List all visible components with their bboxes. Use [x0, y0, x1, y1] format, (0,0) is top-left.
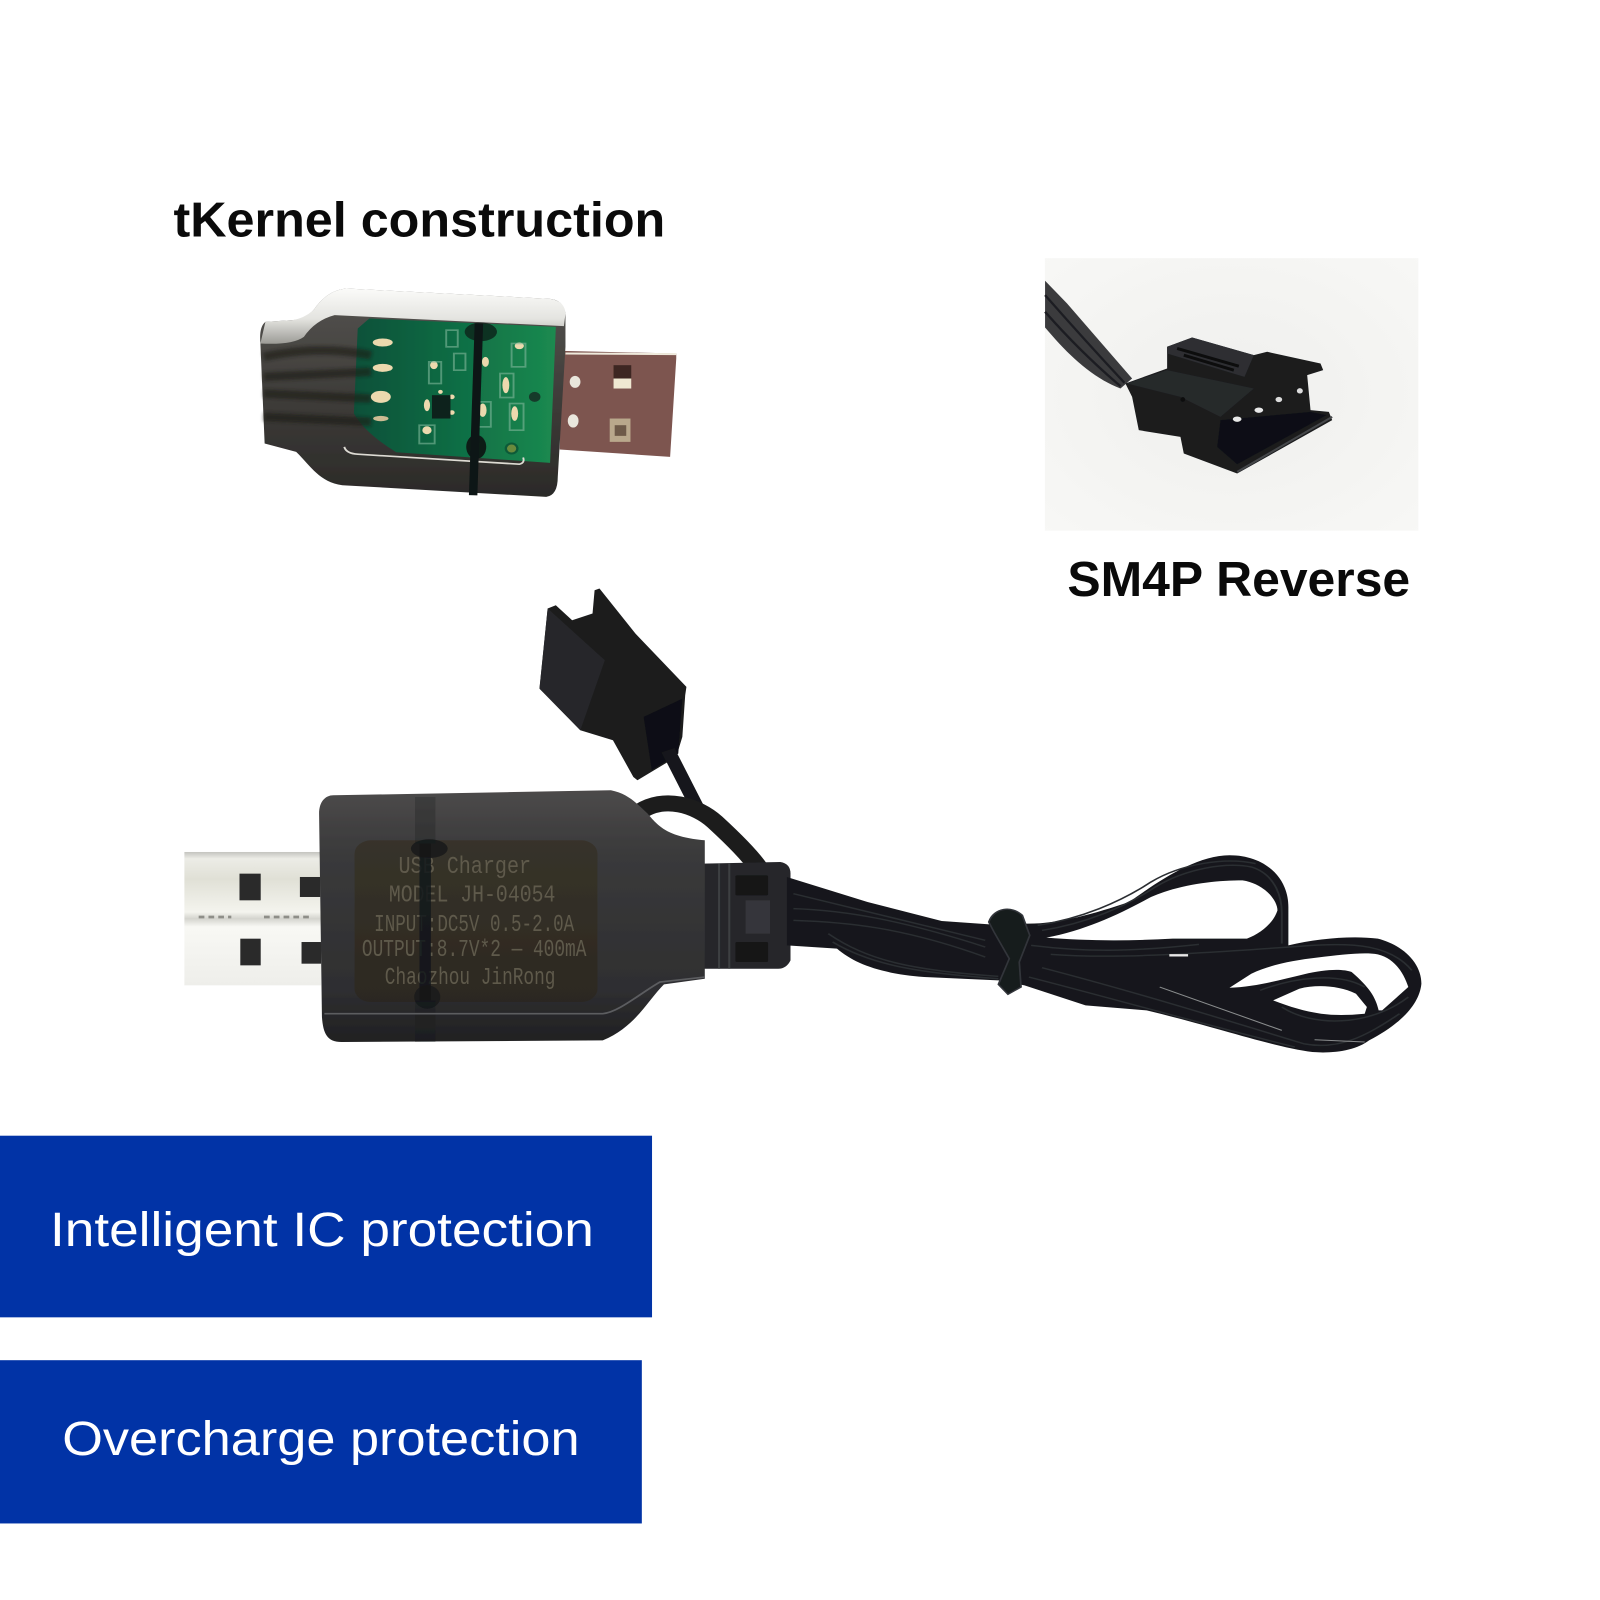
circuit board: [354, 318, 556, 463]
label text: Chaozhou JinRong: [385, 965, 555, 992]
flat cable with loops and tie: [787, 855, 1421, 1052]
charger body: [319, 790, 705, 1042]
cable tie: [989, 909, 1030, 994]
label text: [362, 854, 587, 992]
PCB solder pads: [371, 338, 524, 434]
SM4P connector: [1045, 281, 1332, 474]
connector wires: [668, 750, 699, 810]
feature banner: Intelligent IC protection: Intelligent IC protection: [50, 1204, 594, 1257]
small SM connector: [539, 589, 686, 780]
printed label window: [355, 840, 597, 1002]
feature banner: Overcharge protection: Overcharge protection: [62, 1413, 580, 1466]
label text: INPUT:DC5V 0.5-2.0A: [374, 912, 575, 939]
label text: MODEL JH-04054: [389, 882, 555, 909]
internal wires: [263, 350, 371, 422]
IC chip: [432, 395, 450, 419]
wire highlights: [793, 861, 1412, 1047]
feature banner: Overcharge protection: [0, 1360, 642, 1523]
USB metal plug: [184, 852, 321, 985]
inner black core: [411, 797, 448, 1042]
lower window seam: [344, 447, 524, 464]
shell light cap: [260, 288, 565, 344]
photo: open USB charger showing circuit board: [260, 288, 676, 497]
cable silhouette: [787, 855, 1421, 1052]
shell: [260, 288, 565, 497]
black core line: [473, 323, 479, 495]
PCB silkscreen outlines: [419, 330, 525, 444]
label: SM4P Reverse: SM4P Reverse: [1067, 553, 1410, 607]
wire loop behind body: [639, 803, 758, 867]
photo: USB charger body, plug and small connector: [184, 589, 791, 1042]
label text: USB Charger: [398, 854, 531, 881]
photo background: [1045, 258, 1418, 531]
label text: OUTPUT:8.7V*2 — 400mA: [362, 937, 587, 964]
strain relief collar: [703, 862, 791, 969]
feature banner: Intelligent IC protection: [0, 1136, 652, 1317]
USB plug copper: [560, 351, 676, 457]
photo: SM4P connector panel: [1045, 258, 1418, 531]
heading: tKernel construction: tKernel construction: [173, 194, 665, 248]
